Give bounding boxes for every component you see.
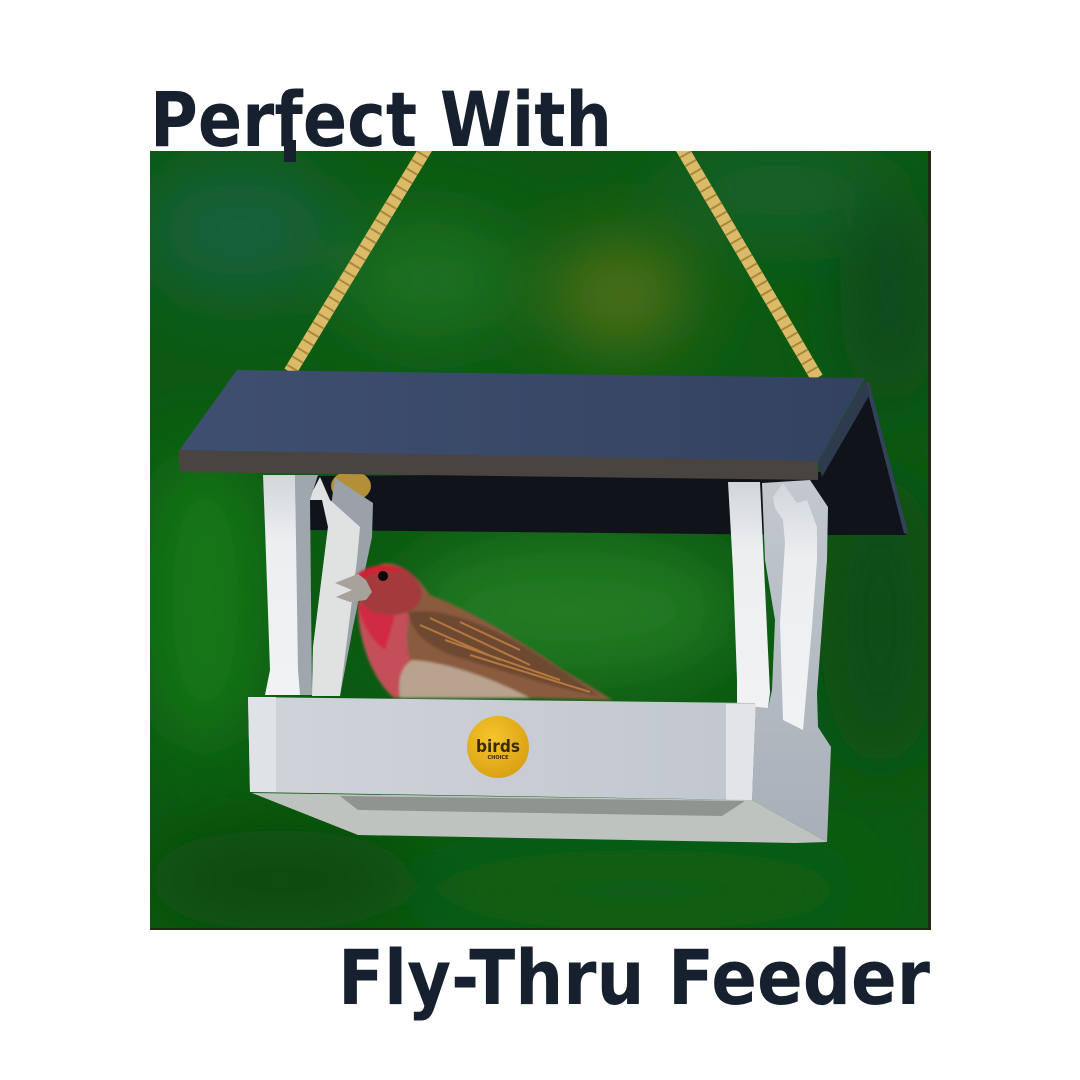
bird [335, 563, 613, 700]
bird breast [358, 603, 425, 697]
logo badge [467, 716, 529, 778]
bird beak [335, 574, 372, 602]
bird body [358, 563, 613, 700]
rope [290, 145, 817, 378]
roof side edge [818, 380, 870, 477]
photo: blurred green background [140, 140, 940, 930]
bird head [358, 565, 422, 615]
bird wing [408, 611, 600, 696]
front left post [263, 475, 318, 695]
roof front edge [178, 450, 818, 480]
tray left cap [248, 697, 276, 792]
bird wing streaks [420, 618, 590, 692]
logo badge: CHOICE [487, 755, 509, 761]
tray right cap [726, 704, 756, 800]
feeder front tray [248, 697, 755, 800]
photo edge: dark right and bottom shadow [150, 151, 931, 930]
roof top [178, 370, 865, 462]
bird eye [378, 571, 388, 581]
rear roof panel [308, 380, 906, 535]
bird belly [399, 660, 530, 698]
bird feeder [178, 145, 906, 843]
bird crown [354, 565, 405, 582]
title: Fly-Thru Feeder: Fly-Thru Feeder [338, 933, 930, 1022]
title: Perfect With: Perfect With [150, 75, 612, 164]
front right post [728, 482, 770, 708]
roof knot [331, 471, 371, 501]
back right post and side panel [752, 480, 831, 842]
back left post [308, 477, 373, 696]
title descender: f stem over photo [284, 140, 296, 162]
logo badge: birds [476, 737, 520, 757]
tray underside [252, 793, 827, 843]
